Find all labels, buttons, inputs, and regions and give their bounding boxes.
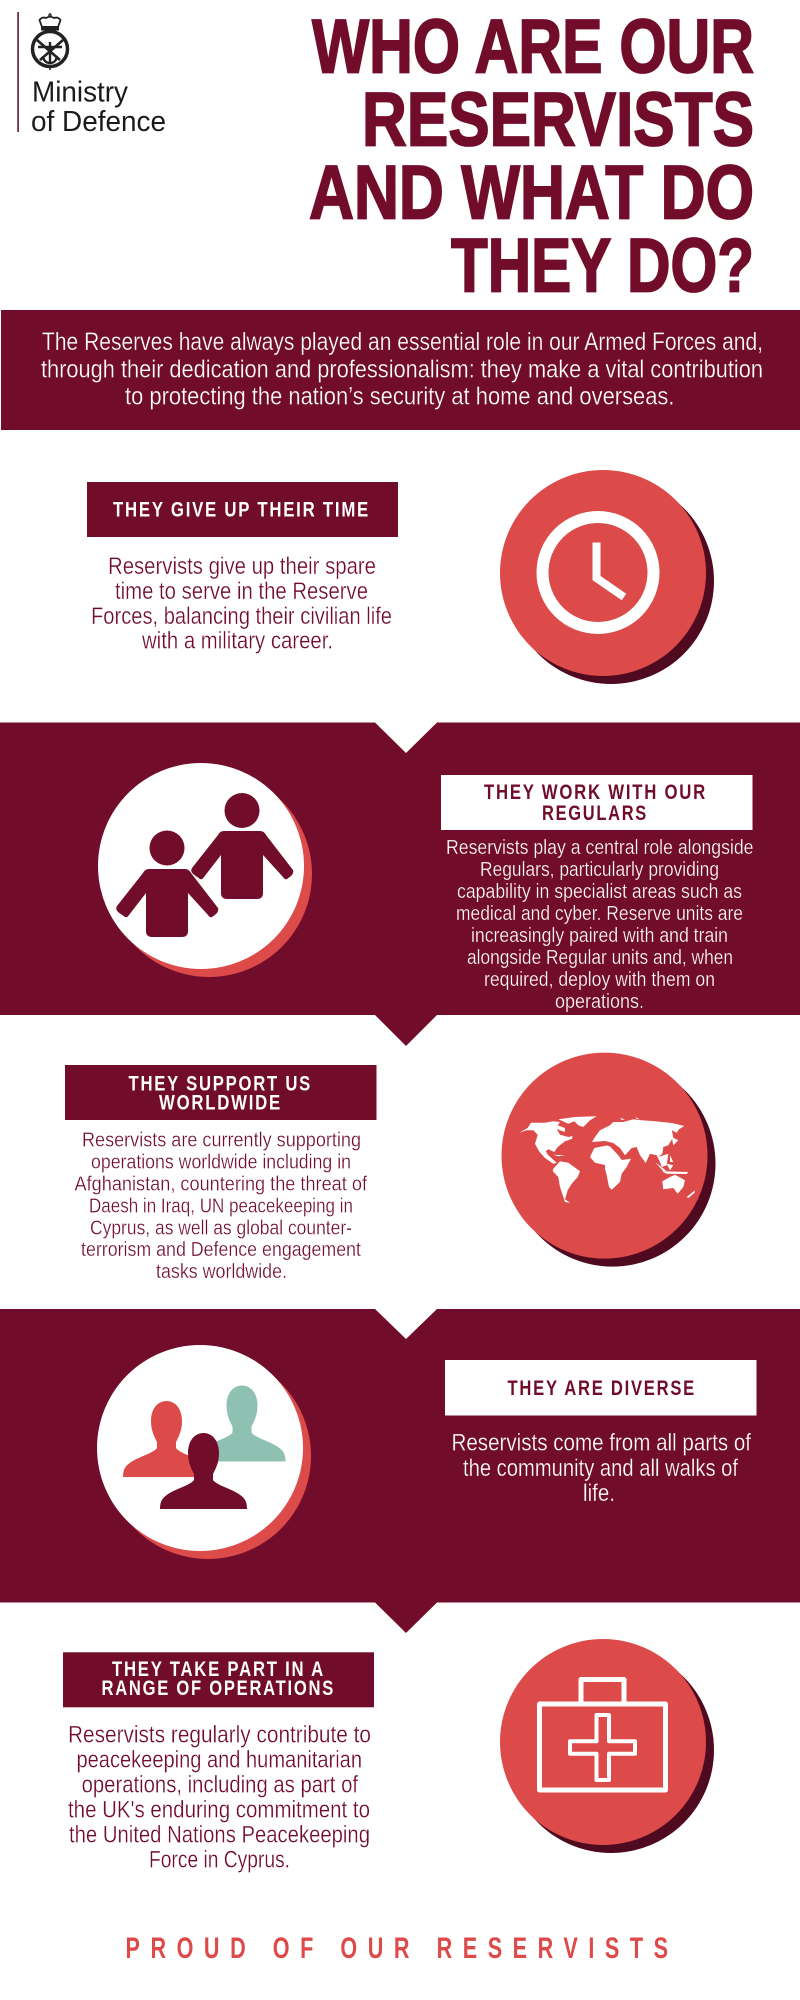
- body text: [452, 1430, 751, 1507]
- panel: they give up their time: [87, 470, 714, 684]
- body text: [91, 553, 392, 655]
- icon: first aid kit: [500, 1639, 714, 1853]
- heading: RANGE OF OPERATIONS: [102, 1677, 335, 1700]
- heading: [63, 1652, 374, 1707]
- heading: THEY ARE DIVERSE: [508, 1377, 696, 1400]
- body text: Reservists give up their spare: [108, 553, 376, 580]
- body text: Forces, balancing their civilian life: [91, 603, 392, 630]
- heading: THEY SUPPORT US: [128, 1072, 312, 1096]
- body text: [74, 1128, 367, 1283]
- body text: terrorism and Defence engagement: [81, 1238, 361, 1261]
- body text: Cyprus, as well as global counter-: [90, 1216, 352, 1239]
- logo wordmark: [31, 76, 166, 138]
- heading: [441, 775, 752, 830]
- body text: operations.: [555, 990, 644, 1013]
- icon: clock: [500, 470, 714, 684]
- body text: tasks worldwide.: [156, 1260, 287, 1283]
- body text: the community and all walks of: [463, 1455, 738, 1482]
- intro text: to protecting the nation’s security at home and overseas.: [125, 382, 674, 410]
- body text: the UK's enduring commitment to: [68, 1797, 370, 1824]
- body text: Afghanistan, countering the threat of: [74, 1172, 367, 1195]
- logo wordmark: of Defence: [31, 106, 166, 138]
- icon: world map: [502, 1053, 716, 1267]
- body text: peacekeeping and humanitarian: [76, 1747, 362, 1774]
- intro text: [41, 328, 763, 410]
- heading: [445, 1360, 756, 1416]
- icon: three silhouettes: [97, 1345, 311, 1559]
- body text: Reservists regularly contribute to: [68, 1722, 371, 1749]
- heading: REGULARS: [542, 802, 648, 825]
- body text: capability in specialist areas such as: [457, 880, 742, 903]
- panel: they are diverse: [0, 1309, 800, 1633]
- body text: medical and cyber. Reserve units are: [456, 902, 743, 925]
- body text: [68, 1722, 371, 1874]
- title: [309, 5, 754, 309]
- body text: alongside Regular units and, when: [467, 946, 733, 969]
- logo: Ministry of Defence: [17, 12, 166, 138]
- heading: THEY WORK WITH OUR: [484, 781, 707, 804]
- footer slogan: PROUD OF OUR RESERVISTS: [126, 1930, 668, 1965]
- logo wordmark: Ministry: [32, 76, 128, 108]
- heading: THEY GIVE UP THEIR TIME: [113, 498, 370, 522]
- body text: Regulars, particularly providing: [480, 858, 719, 881]
- icon: two people: [98, 763, 312, 977]
- heading: [87, 482, 398, 537]
- body text: Reservists are currently supporting: [82, 1128, 361, 1151]
- body text: increasingly paired with and train: [471, 924, 728, 947]
- body text: [446, 836, 754, 1013]
- icon: royal crest: [32, 13, 68, 70]
- body text: with a military career.: [141, 628, 333, 655]
- body text: life.: [583, 1480, 615, 1507]
- body text: time to serve in the Reserve: [115, 578, 368, 605]
- body text: Force in Cyprus.: [149, 1847, 290, 1874]
- panel: introduction banner: [1, 310, 800, 430]
- body text: Reservists play a central role alongside: [446, 836, 754, 859]
- body text: operations, including as part of: [82, 1772, 358, 1799]
- body text: the United Nations Peacekeeping: [69, 1822, 370, 1849]
- heading: [65, 1065, 376, 1120]
- body text: required, deploy with them on: [484, 968, 715, 991]
- body text: operations worldwide including in: [91, 1150, 351, 1173]
- heading: WORLDWIDE: [159, 1092, 282, 1115]
- panel: they take part in a range of operations: [63, 1639, 714, 1874]
- panel: they support us worldwide: [65, 1053, 716, 1283]
- heading: THEY TAKE PART IN A: [112, 1658, 325, 1681]
- body text: Reservists come from all parts of: [452, 1430, 751, 1457]
- panel: they work with our regulars: [0, 722, 800, 1046]
- body text: Daesh in Iraq, UN peacekeeping in: [89, 1194, 353, 1217]
